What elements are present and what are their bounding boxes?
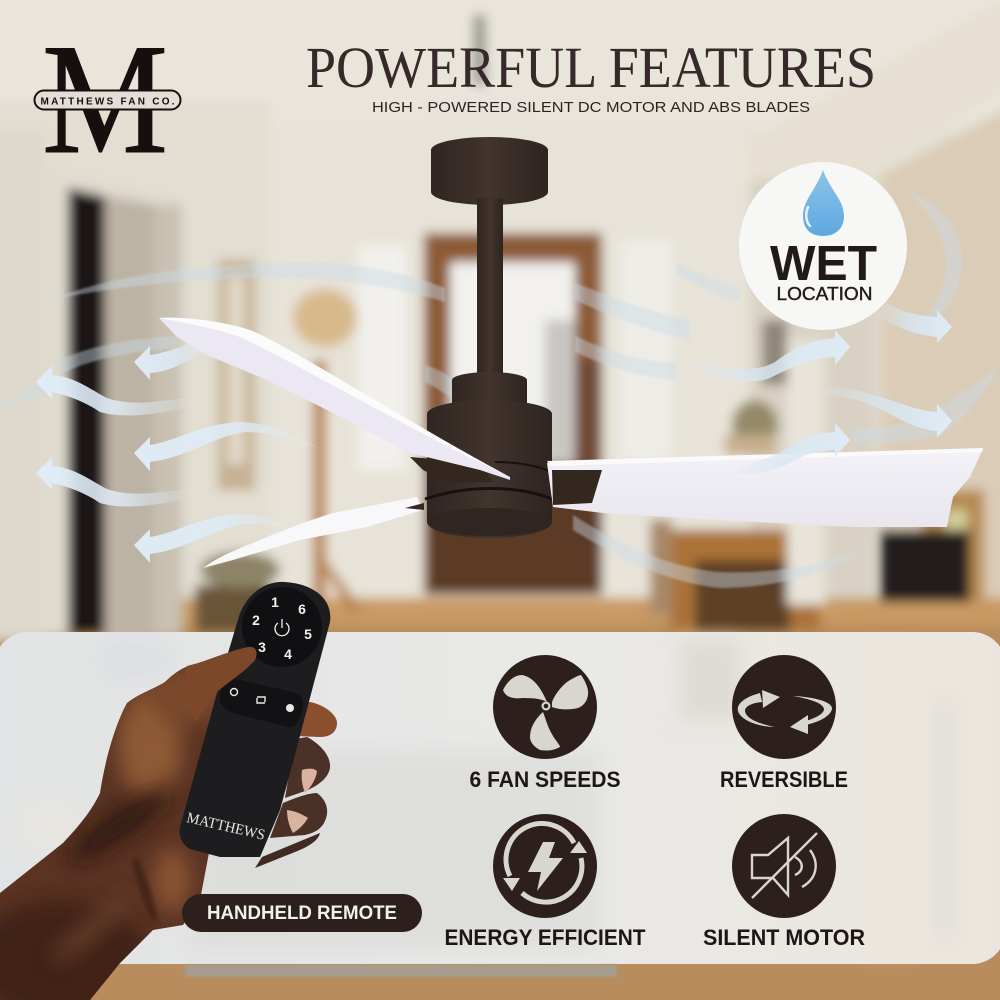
remote control: MATTHEWS: [185, 810, 267, 844]
arrow: far left one: [36, 366, 185, 415]
feature: reversible: REVERSIBLE: [720, 767, 848, 792]
arrow: upper right outer: [877, 303, 952, 343]
fingers: [255, 702, 337, 868]
feature: energy efficient: ENERGY EFFICIENT: [444, 925, 646, 950]
arrow: middle left: [134, 422, 325, 471]
wet location badge: LOCATION: [776, 284, 872, 304]
subtitle: HIGH - POWERED SILENT DC MOTOR AND ABS BLADES: [372, 99, 810, 116]
remote speed buttons: 1: [271, 594, 279, 610]
remote speed buttons: [242, 587, 322, 667]
title: POWERFUL FEATURES: [306, 35, 876, 100]
feature: 6 fan speeds: 6 FAN SPEEDS: [470, 767, 620, 792]
remote light buttons: [220, 677, 303, 727]
icon: muted speaker: [752, 833, 817, 898]
remote speed buttons: 3: [258, 639, 266, 655]
fan motor housing: [425, 372, 552, 538]
wet location badge: [739, 162, 907, 330]
brand logo: M: [42, 12, 168, 187]
ceiling fan: [159, 137, 983, 568]
handheld remote pill: [182, 894, 422, 932]
icon: water drop: [803, 170, 844, 236]
feature: energy efficient: [444, 814, 646, 950]
feature: silent motor: [703, 814, 865, 950]
faint airflow bands: [0, 190, 1000, 588]
arrow: lower right outer: [827, 387, 952, 438]
fan blade: left lower: [203, 497, 423, 568]
arrow: upper left: [134, 336, 208, 380]
fan downrod: [477, 198, 503, 375]
arrow: far left two: [36, 457, 185, 506]
handheld remote pill: HANDHELD REMOTE: [207, 903, 397, 924]
hand holding remote: [0, 582, 337, 1000]
feature panel: [0, 632, 1000, 964]
fan blade: left upper: [159, 318, 510, 480]
remote speed buttons: 5: [304, 626, 312, 642]
fan blade: right: [547, 448, 983, 527]
icon: fan: [503, 675, 588, 751]
icon: reversing arrows: [738, 690, 832, 734]
airflow arrows: [36, 303, 952, 563]
remote speed buttons: 6: [298, 601, 306, 617]
arrow: lower left: [134, 514, 295, 563]
icon: energy cycle: [503, 823, 587, 902]
wet location badge: WET: [770, 237, 877, 291]
forearm and back of hand: [0, 664, 218, 1000]
airflow arrow over right blade: [733, 423, 850, 474]
rug below panel: [185, 965, 617, 977]
fan canopy: [431, 137, 548, 205]
arrow: upper right inner: [677, 330, 850, 381]
thumb: [185, 647, 257, 722]
blade irons: [405, 457, 602, 510]
feature: 6 fan speeds: [470, 655, 620, 792]
feature: silent motor: SILENT MOTOR: [703, 925, 865, 950]
remote speed buttons: 4: [284, 646, 292, 662]
feature: reversible: [720, 655, 848, 792]
brand logo: MATTHEWS FAN CO.: [40, 96, 175, 108]
remote control: [179, 582, 330, 857]
remote speed buttons: 2: [252, 612, 260, 628]
